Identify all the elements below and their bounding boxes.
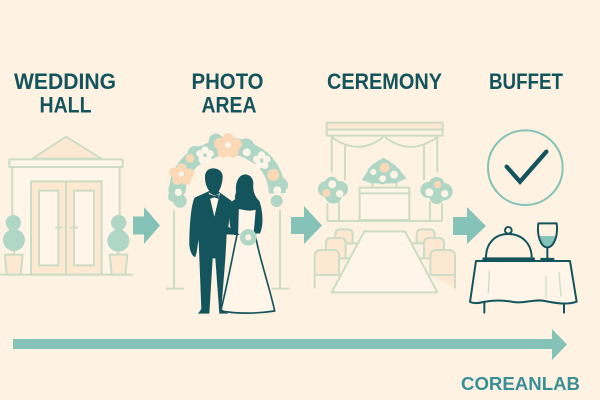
chairs [315,229,455,288]
floral arch [168,133,288,208]
arrow: long timeline [13,329,567,360]
heading: wedding hall: HALL [40,92,92,118]
icon: buffet table with cloche and wine glass [470,223,577,313]
icon: wedding hall building [0,137,133,275]
icon: check mark in circle [488,130,563,205]
heading: photo area: AREA [202,92,257,118]
aisle carpet [332,231,437,292]
icon: ceremony stage and aisle [315,123,455,292]
groom [189,168,240,314]
heading: wedding hall [14,69,116,118]
heading: photo area [192,69,264,118]
stage and altar [327,180,442,221]
canopy [327,123,443,180]
arch poles [166,210,289,289]
arrow: hall to photo [133,207,160,244]
arrow: ceremony to buffet [453,207,486,244]
heading: buffet: BUFFET [489,69,563,94]
flower arrangements [318,158,453,204]
wine glass [538,223,557,259]
cloche [484,227,533,259]
arrow: photo to ceremony [291,206,322,244]
heading: photo area: PHOTO [192,69,264,94]
heading: wedding hall: WEDDING [14,69,116,94]
icon: couple under floral arch [166,133,289,314]
heading: ceremony: CEREMONY [327,69,442,94]
brand label: COREANLAB [461,373,580,394]
bride [221,174,275,313]
table with cloth [470,261,577,313]
